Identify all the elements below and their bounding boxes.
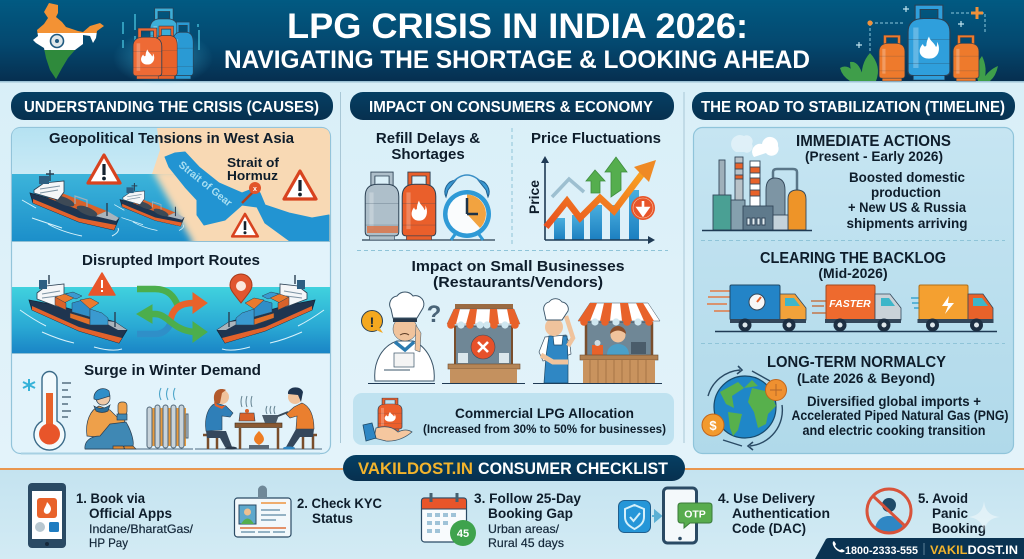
heading: geopolitical: Geopolitical Tensions in West Asia (49, 130, 295, 147)
block: refill delays: Shortages (391, 146, 465, 163)
title (224, 7, 810, 74)
map: Strait of Hormuz: x (253, 186, 257, 193)
heading: consumer checklist: CONSUMER CHECKLIST (478, 460, 668, 478)
disrupted import routes block (12, 252, 330, 353)
heading: import routes: Disrupted Import Routes (82, 252, 260, 269)
text: step 5: Booking (932, 521, 986, 536)
icon: warning (89, 273, 115, 295)
heading: causes: UNDERSTANDING THE CRISIS (CAUSES) (24, 99, 319, 116)
icon: rerouting arrows (137, 289, 207, 342)
icon: thermometer (34, 372, 71, 450)
icon: globe with coins (702, 366, 786, 450)
text: step 1: HP Pay (89, 536, 128, 550)
text: step 1 (76, 491, 194, 550)
icon: worried chef (362, 292, 441, 381)
title: LPG CRISIS IN INDIA 2026: (287, 7, 748, 46)
header banner (0, 0, 1024, 86)
map: Strait of Hormuz: Strait of Gear (176, 159, 234, 209)
block: long-term normalcy: and electric cooking transition (802, 423, 986, 438)
icon: truck three (911, 285, 994, 332)
block: refill delays (362, 130, 495, 240)
section divider lines (340, 92, 684, 443)
heading: timeline (692, 92, 1015, 120)
callout: commercial LPG allocation (353, 393, 674, 445)
panel: consumer checklist (0, 455, 1024, 559)
icon: left LPG cylinders (113, 10, 213, 86)
item 1: book via official apps (28, 483, 194, 550)
icon: closed shop (447, 304, 520, 383)
text: contact: 1800-2333-555 (845, 545, 918, 557)
block: immediate actions (702, 133, 968, 231)
block: immediate actions: Boosted domestic (849, 170, 965, 185)
icon: worried chef: ! (370, 314, 374, 330)
icon: location pin (230, 274, 252, 303)
text: allocation (423, 405, 666, 436)
text: contact: VAKILDOST.IN (930, 543, 1018, 557)
text: step 4 (718, 491, 830, 536)
map: Strait of Hormuz (165, 152, 329, 240)
text: step 3: Booking Gap (488, 506, 573, 521)
block: long-term normalcy (702, 354, 1008, 450)
icon: hand holding cylinder (363, 399, 412, 441)
item 3: follow booking gap (422, 491, 581, 550)
block: immediate actions: + New US & Russia (848, 200, 966, 215)
icon: radiator with heat (147, 388, 188, 448)
block: long-term normalcy: Diversified global imports + (807, 394, 981, 409)
text: step 5: 5. Avoid (918, 491, 968, 506)
block: immediate actions: shipments arriving (846, 216, 968, 231)
text: step 3: Urban areas/ (488, 522, 560, 536)
text: contact (845, 543, 1018, 557)
icon: globe with coins: $ (709, 418, 717, 433)
text: step 1: 1. Book via (76, 491, 145, 506)
block: immediate actions: IMMEDIATE ACTIONS (796, 133, 951, 150)
text: step 5 (918, 491, 986, 536)
heading: impact: IMPACT ON CONSUMERS & ECONOMY (369, 99, 653, 116)
decorative sparkle (968, 501, 1000, 533)
block: small businesses: (Restaurants/Vendors) (433, 274, 603, 291)
text: step 4: Code (DAC) (732, 521, 806, 536)
text: step 1: Indane/BharatGas/ (89, 522, 194, 536)
text: step 4: 4. Use Delivery (718, 491, 815, 506)
block: immediate actions: (Present - Early 2026) (805, 148, 943, 164)
block: price fluctuations: Price Fluctuations (531, 130, 661, 147)
text: step 2: 2. Check KYC (297, 496, 382, 511)
icon: orange cylinder (402, 174, 436, 240)
block: clearing the backlog: (Mid-2026) (818, 265, 888, 281)
title: NAVIGATING THE SHORTAGE & LOOKING AHEAD (224, 46, 810, 74)
icon: container ships (20, 275, 324, 350)
text: step 2 (297, 496, 382, 526)
icon: worried chef: ? (427, 301, 441, 328)
text: step 1: Official Apps (89, 506, 172, 521)
text: step 3: Rural 45 days (488, 536, 564, 550)
winter demand block (23, 362, 322, 450)
heading: winter demand: Surge in Winter Demand (84, 362, 261, 379)
block: refill delays: Refill Delays & (376, 130, 480, 147)
chart: price line with arrows (541, 156, 656, 244)
item 2: check KYC status (234, 486, 382, 537)
icon: India map (33, 3, 104, 79)
label: Strait of Hormuz: Strait of (227, 155, 280, 170)
geopolitical tensions block (12, 128, 330, 241)
text: step 3 (474, 491, 581, 550)
item 5: avoid panic booking (867, 489, 986, 536)
icon: alarm clock (443, 175, 491, 240)
label: price axis: Price (526, 180, 542, 214)
icon: phone with apps (28, 483, 66, 548)
icon: calendar: 45 (457, 528, 469, 540)
text: allocation: (Increased from 30% to 50% for businesses) (423, 422, 666, 436)
block: long-term normalcy: Accelerated Piped Natural Gas (PNG) (792, 408, 1008, 423)
heading: impact (350, 92, 674, 120)
icon: right LPG cylinders and leaves (840, 6, 998, 81)
icon: factory (702, 135, 812, 230)
heading: consumer checklist: VAKILDOST.IN (358, 460, 473, 478)
text: step 5: Panic (932, 506, 968, 521)
text: step 3: 3. Follow 25-Day (474, 491, 581, 506)
heading: causes (11, 92, 333, 120)
label: Strait of Hormuz: Hormuz (227, 168, 279, 183)
block: clearing the backlog: CLEARING THE BACKLOG (760, 250, 946, 267)
footer contact bar (815, 538, 1024, 559)
block: long-term normalcy: (Late 2026 & Beyond) (797, 370, 935, 386)
heading: consumer checklist (343, 455, 685, 481)
panel: causes (11, 92, 340, 454)
icon: shield, phone and OTP: OTP (684, 508, 706, 520)
icon: person in blanket (85, 389, 136, 449)
item 4: delivery authentication code (618, 488, 830, 543)
block: price fluctuations (526, 130, 661, 244)
block: long-term normalcy: LONG-TERM NORMALCY (767, 354, 947, 371)
icon: phone handset (833, 541, 845, 552)
panel: timeline (692, 92, 1015, 454)
icon: people around fire (203, 387, 317, 450)
icon: shield, phone and OTP (618, 488, 712, 543)
icon: truck two: FASTER (829, 298, 871, 310)
icon: no panic sign (867, 489, 911, 533)
icon: snowflake (23, 379, 35, 391)
icon: truck one (707, 285, 806, 332)
block: small businesses (362, 258, 662, 384)
icon: food stall (578, 303, 660, 383)
icon: empty gray cylinder (365, 174, 399, 240)
heading: timeline: THE ROAD TO STABILIZATION (TIMELINE) (701, 99, 1005, 116)
panel: impact on consumers and economy (350, 92, 674, 445)
icon: warning triangles (88, 155, 316, 236)
block: clearing the backlog (707, 250, 997, 332)
icon: cook with apron (539, 299, 573, 383)
text: step 2: Status (312, 511, 353, 526)
block: immediate actions: production (871, 185, 941, 200)
icon: tanker ships (22, 170, 184, 236)
block: small businesses: Impact on Small Businesses (412, 258, 624, 275)
icon: ID card (234, 486, 291, 537)
text: allocation: Commercial LPG Allocation (455, 405, 634, 421)
text: step 4: Authentication (732, 506, 830, 521)
icon: calendar (422, 493, 476, 546)
icon: truck two (811, 285, 901, 332)
